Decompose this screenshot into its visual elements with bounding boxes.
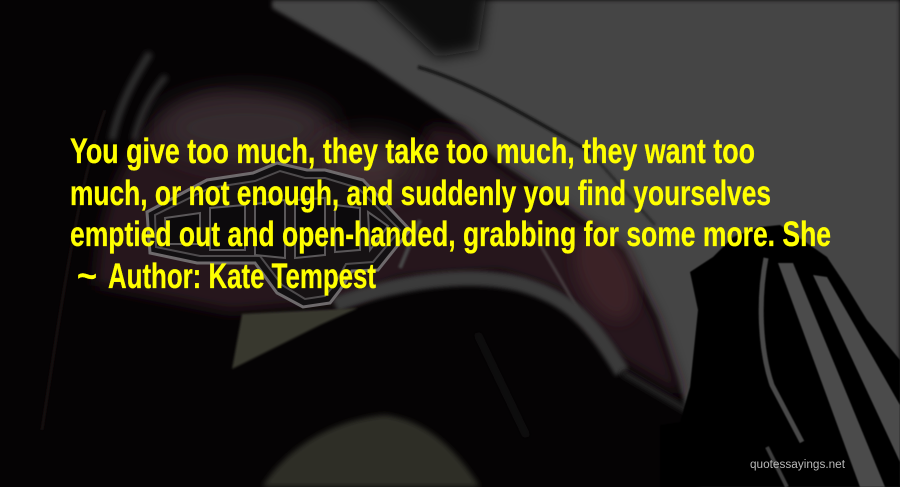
inner grey stripes [527,222,590,330]
author line: Author: Kate Tempest [108,257,376,296]
dome highlight [157,94,333,162]
top shadow behind helmet [345,0,490,57]
helmet rim [335,279,622,372]
watermark: quotessayings.net [750,459,846,471]
quote text [70,132,831,254]
red shine right [561,221,649,329]
ridge crease [418,67,590,152]
grey backdrop and ridge band [272,0,900,487]
dark gear on the right [660,225,900,487]
badge logo [147,163,410,307]
olive visor patch [232,308,358,369]
faint lower stripe [477,333,527,437]
pink shine [316,137,420,193]
left streaks [112,53,150,140]
gear stripes [761,258,802,442]
author line [77,257,376,296]
author line: ~ [77,257,97,296]
helmet red field [95,92,683,397]
olive lower patch [262,415,480,487]
